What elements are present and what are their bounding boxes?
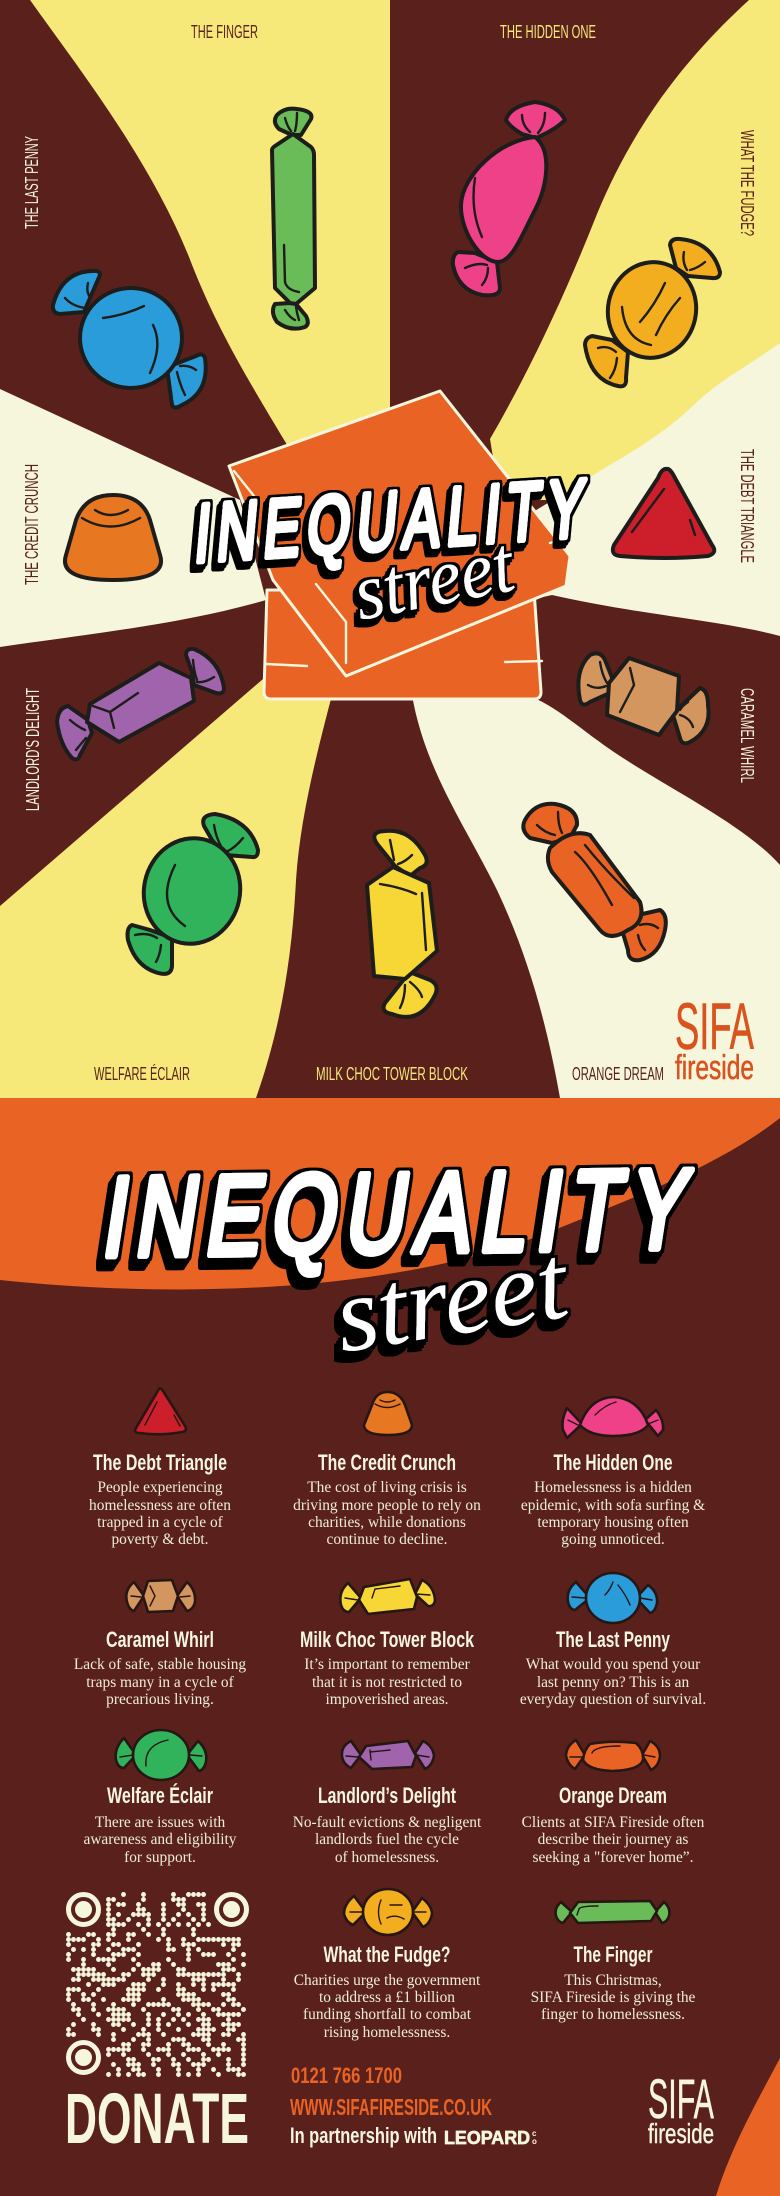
candy: milk choc tower block [367,831,437,1017]
label: the finger: THE FINGER [191,22,258,42]
label: landlord's delight: LANDLORD'S DELIGHT [23,688,43,811]
description: precarious living. [106,1691,214,1708]
description: that it is not restricted to [312,1674,462,1691]
description: seeking a "forever home”. [533,1849,693,1866]
card: the hidden one [521,1397,705,1548]
description: continue to decline. [327,1531,447,1548]
logo: SIFA Fireside cream [648,2067,714,2149]
card: welfare eclair [83,1730,237,1866]
description: It’s important to remember [304,1656,470,1673]
heading: The Last Penny [556,1627,671,1652]
description: of homelessness. [335,1849,439,1866]
description: traps many in a cycle of [86,1674,235,1691]
description: People experiencing [97,1479,223,1496]
candy: welfare eclair [128,814,258,974]
description: going unnoticed. [561,1531,665,1548]
heading: Orange Dream [559,1783,667,1808]
description: temporary housing often [537,1514,689,1531]
description: poverty & debt. [111,1531,209,1548]
candy: the credit crunch [65,495,161,580]
description: awareness and eligibility [83,1831,237,1848]
description: funding shortfall to combat [303,2006,472,2023]
icon: orange gum [364,1392,412,1435]
ray: orange dream [412,695,780,1098]
description: epidemic, with sofa surfing & [521,1497,705,1514]
icon: orange candy [566,1740,660,1771]
description: The cost of living crisis is [307,1479,467,1496]
icon: green bar [556,1901,669,1923]
label: the debt triangle: THE DEBT TRIANGLE [737,449,757,563]
candy: the finger [272,109,315,329]
heading: What the Fudge? [324,1942,450,1967]
description: driving more people to rely on [293,1497,481,1514]
heading: The Finger [574,1942,653,1967]
heading: The Debt Triangle [93,1450,227,1475]
card: the debt triangle [89,1388,231,1548]
candy: what the fudge [585,239,720,386]
label: milk choc tower block: MILK CHOC TOWER BLOCK [316,1064,468,1084]
description: to address a £1 billion [319,1989,455,2006]
candy: caramel whirl [578,653,709,743]
candy: the debt triangle [613,469,714,558]
description: Lack of safe, stable housing [74,1656,246,1673]
description: Charities urge the government [294,1972,481,1989]
icon: purple candy [342,1741,434,1769]
description: for support. [124,1849,196,1866]
ray: credit crunch [0,389,266,647]
description: everyday question of survival. [520,1691,706,1708]
illustration: orange wrapped box [229,391,570,699]
label: welfare eclair: WELFARE ÉCLAIR [94,1064,190,1084]
heading: Inequality: INEQUALITY [96,1147,708,1281]
partnership line: c [532,2129,537,2138]
phone number: 0121 766 1700 [291,2063,402,2088]
description: homelessness are often [89,1497,231,1514]
partnership line: In partnership with [290,2123,437,2148]
icon: gold candy [344,1889,432,1935]
card: the credit crunch [293,1392,481,1548]
donate label: DONATE [65,2080,249,2159]
heading: Landlord’s Delight [318,1783,456,1808]
partnership line: o [532,2137,537,2146]
orange curved band [0,1098,780,1289]
card: orange dream [522,1740,705,1866]
description: What would you spend your [526,1656,700,1673]
label: the last penny: THE LAST PENNY [22,136,42,229]
ray: debt triangle [520,343,780,636]
ray: the finger [30,0,390,470]
card: the finger [531,1901,696,2023]
website: WWW.SIFAFIRESIDE.CO.UK [290,2094,492,2120]
candy: the last penny [53,271,206,408]
description: trapped in a cycle of [97,1514,224,1531]
orange corner curve [716,2058,780,2196]
logo: SIFA Fireside orange [675,989,754,1087]
icon: blue candy [568,1573,657,1623]
description: last penny on? This is an [537,1674,689,1691]
label: the credit crunch: THE CREDIT CRUNCH [22,464,42,585]
icon: green candy [116,1730,206,1780]
ray: what the fudge [490,0,780,500]
candy: the hidden one [453,102,565,295]
heading: street: street [327,1222,577,1375]
description: This Christmas, [564,1972,662,1989]
label: what the fudge: WHAT THE FUDGE? [737,130,757,236]
description: landlords fuel the cycle [315,1831,459,1848]
description: SIFA Fireside is giving the [531,1989,696,2006]
logo: SIFA Fireside cream: SIFA [648,2067,714,2130]
description: Clients at SIFA Fireside often [522,1814,705,1831]
title on box: INEQUALITY [191,461,596,580]
description: charities, while donations [308,1514,466,1531]
ray: welfare eclair [0,679,332,1098]
icon: pink candy [562,1397,663,1438]
description: impoverished areas. [325,1691,449,1708]
label: caramel whirl: CARAMEL WHIRL [737,688,757,783]
card: what the fudge [294,1889,481,2041]
card: the last penny [520,1573,706,1708]
candy: orange dream [523,804,666,960]
heading: The Credit Crunch [318,1450,456,1475]
description: No-fault evictions & negligent [293,1814,482,1831]
description: There are issues with [95,1814,225,1831]
candy: landlord's delight [57,649,224,759]
description: finger to homelessness. [541,2006,685,2023]
card: landlord's delight [293,1741,482,1866]
heading: Milk Choc Tower Block [300,1627,475,1652]
panel: candy sunburst [0,0,780,1098]
card: milk choc tower block [300,1579,475,1708]
heading: Caramel Whirl [106,1627,214,1652]
description: rising homelessness. [324,2024,450,2041]
subtitle on box: street [347,520,522,638]
heading: The Hidden One [554,1450,672,1475]
label: orange dream: ORANGE DREAM [572,1064,664,1084]
partnership line: LEOPARD [444,2128,530,2148]
label: the hidden one: THE HIDDEN ONE [500,22,596,42]
icon: caramel candy [126,1580,195,1612]
description: Homelessness is a hidden [534,1479,692,1496]
logo: SIFA Fireside cream: fireside [648,2118,714,2149]
QR code [68,1894,248,2074]
card: caramel whirl [74,1580,246,1708]
icon: yellow candy [340,1579,435,1614]
icon: red triangle [135,1388,186,1434]
heading: Welfare Éclair [107,1783,213,1808]
description: describe their journey as [538,1831,688,1848]
